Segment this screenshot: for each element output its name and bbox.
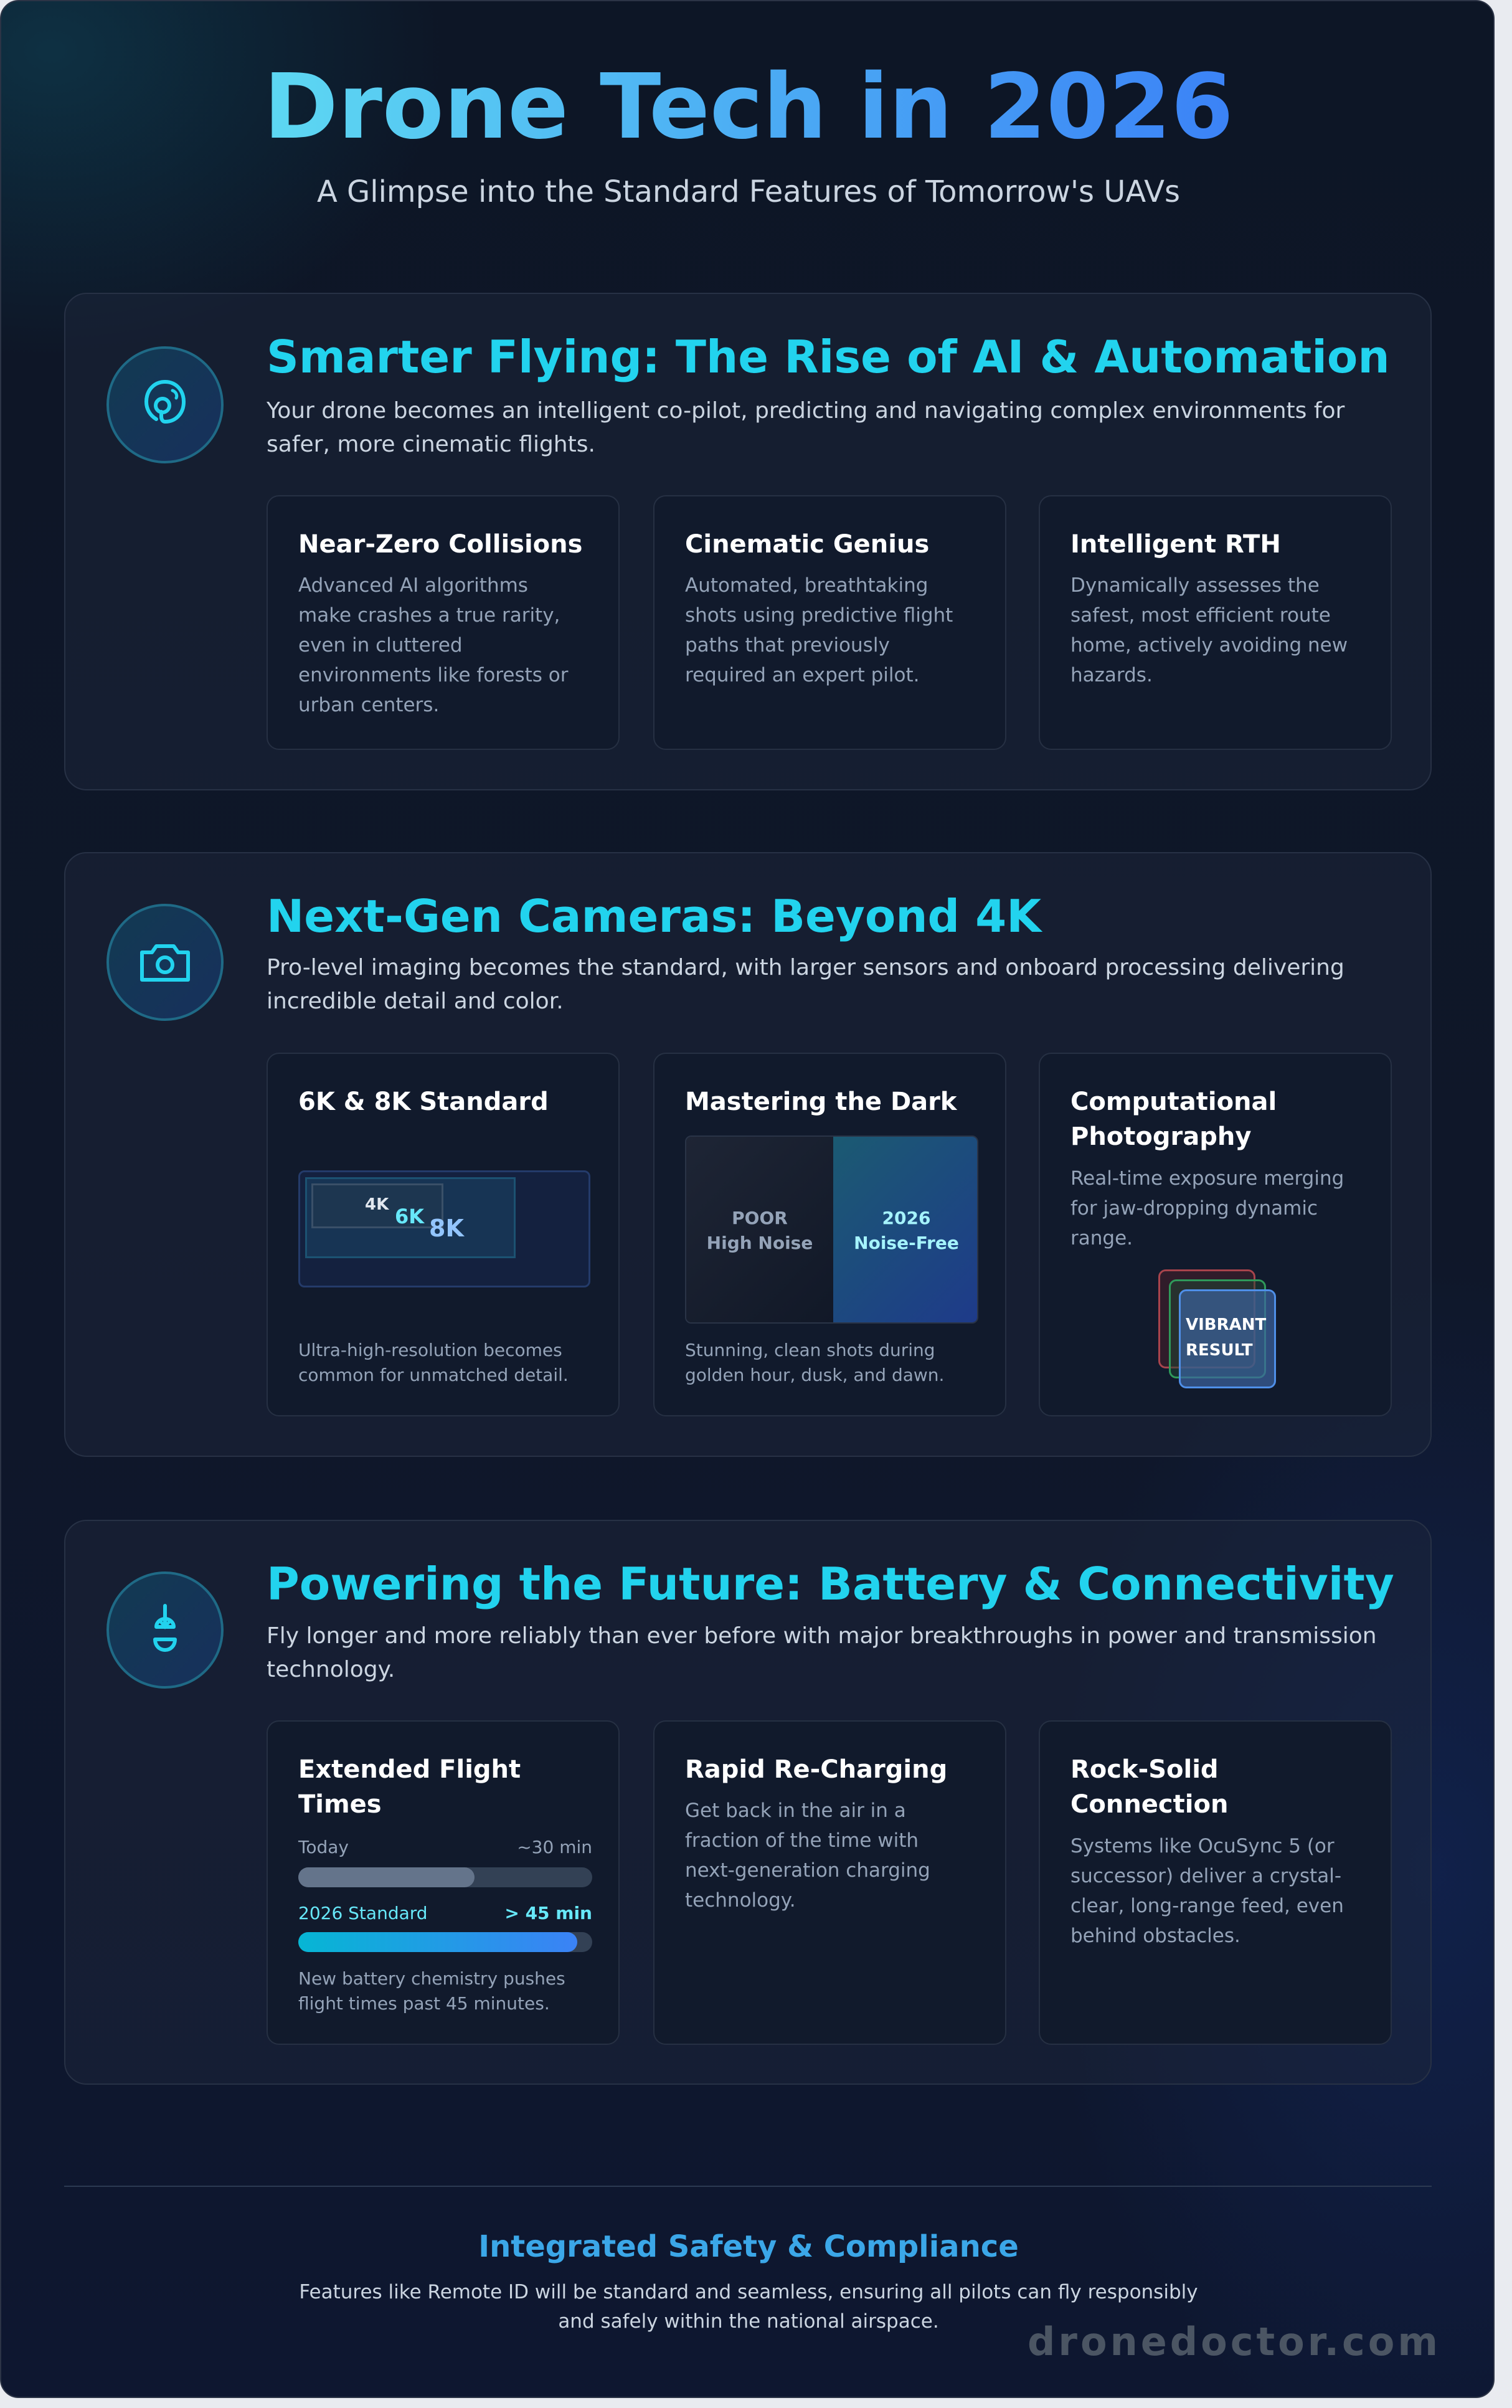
card: rapid re-charging: Get back in the air in a fraction of the time with next-generation charging technology.	[685, 1799, 930, 1912]
card: rock-solid connection: Rock-Solid Connection	[1070, 1755, 1228, 1819]
card: rapid re-charging: Rapid Re-Charging	[685, 1755, 947, 1784]
exposure stack graphic: VIBRANT	[1186, 1315, 1266, 1334]
icon: camera	[106, 904, 224, 1021]
bar chart: flight times: ~30 min	[517, 1837, 592, 1857]
card: extended flight times: New battery chemistry pushes flight times past 45 minutes.	[298, 1968, 565, 2014]
heading: Next-Gen Cameras: Beyond 4K	[267, 890, 1041, 942]
panel: cameras	[64, 852, 1432, 1457]
card: rock-solid connection: Systems like OcuSync 5 (or successor) deliver a crystal-clear, long-range feed, even behind obstacles.	[1070, 1835, 1344, 1947]
card: extended flight times: Extended Flight Times	[298, 1755, 521, 1819]
description: Pro-level imaging becomes the standard, with larger sensors and onboard processing delivering incredible detail and color.	[267, 955, 1344, 1014]
card: cinematic genius: Cinematic Genius	[685, 530, 929, 559]
resolution graphic: 8K	[429, 1215, 464, 1242]
card: 6K & 8K: 6K & 8K Standard	[298, 1088, 549, 1116]
panel: battery & connectivity	[64, 1520, 1432, 2085]
footer: safety & compliance	[299, 2229, 1198, 2333]
card: 6K & 8K	[267, 1053, 620, 1416]
title: Drone Tech in 2026	[263, 54, 1234, 159]
card: computational photography: Computational Photography	[1070, 1088, 1277, 1151]
footer: safety & compliance: Integrated Safety & Compliance	[478, 2229, 1019, 2264]
low light comparison: 2026	[882, 1208, 930, 1228]
subtitle: A Glimpse into the Standard Features of Tomorrow's UAVs	[317, 174, 1180, 209]
card: cinematic genius	[653, 495, 1006, 750]
card: mastering the dark: Stunning, clean shots during golden hour, dusk, and dawn.	[685, 1340, 944, 1385]
bar chart: flight times: 2026 Standard	[298, 1903, 428, 1923]
card: mastering the dark: Mastering the Dark	[685, 1088, 957, 1116]
card: 6K & 8K: Ultra-high-resolution becomes common for unmatched detail.	[298, 1340, 569, 1385]
bar chart: flight times: > 45 min	[504, 1903, 592, 1923]
card: intelligent RTH: Intelligent RTH	[1070, 530, 1281, 559]
card: extended flight times	[267, 1720, 620, 2045]
card: intelligent RTH	[1039, 495, 1392, 750]
card: rapid re-charging	[653, 1720, 1006, 2045]
exposure stack graphic: RESULT	[1186, 1341, 1253, 1360]
low light comparison	[685, 1135, 978, 1324]
panel: AI & automation	[64, 293, 1432, 790]
footer: safety & compliance: Features like Remote ID will be standard and seamless, ensuring all pilots can fly responsibly and safely within the national airspace.	[299, 2281, 1198, 2333]
exposure stack graphic	[1158, 1269, 1276, 1388]
low light comparison: POOR	[732, 1208, 788, 1228]
card: rock-solid connection	[1039, 1720, 1392, 2045]
card: computational photography: Real-time exposure merging for jaw-dropping dynamic range.	[1070, 1167, 1344, 1249]
icon: brain	[106, 346, 224, 463]
card: intelligent RTH: Dynamically assesses the safest, most efficient route home, actively avoiding new hazards.	[1070, 574, 1348, 686]
description: Your drone becomes an intelligent co-pilot, predicting and navigating complex environments for safer, more cinematic flights.	[267, 398, 1344, 457]
resolution graphic: 4K	[365, 1195, 389, 1214]
bar chart: flight times: Today	[298, 1837, 349, 1857]
bar chart: flight times	[298, 1837, 592, 1952]
card: near-zero collisions: Advanced AI algorithms make crashes a true rarity, even in cluttered environments like forests or urban centers.	[298, 574, 568, 716]
card: near-zero collisions: Near-Zero Collisions	[298, 530, 582, 559]
resolution graphic: 6K	[395, 1205, 424, 1228]
heading: Smarter Flying: The Rise of AI & Automation	[267, 331, 1390, 383]
card: mastering the dark	[653, 1053, 1006, 1416]
description: Fly longer and more reliably than ever before with major breakthroughs in power and transmission technology.	[267, 1623, 1377, 1682]
heading: Powering the Future: Battery & Connectivity	[267, 1558, 1394, 1610]
watermark: dronedoctor.com	[1028, 2319, 1441, 2364]
low light comparison: Noise-Free	[854, 1233, 959, 1253]
icon: power	[106, 1571, 224, 1689]
card: near-zero collisions	[267, 495, 620, 750]
card: computational photography	[1039, 1053, 1392, 1416]
low light comparison: High Noise	[707, 1233, 813, 1253]
card: cinematic genius: Automated, breathtaking shots using predictive flight paths that previously required an expert pilot.	[685, 574, 953, 686]
resolution graphic	[298, 1170, 590, 1287]
